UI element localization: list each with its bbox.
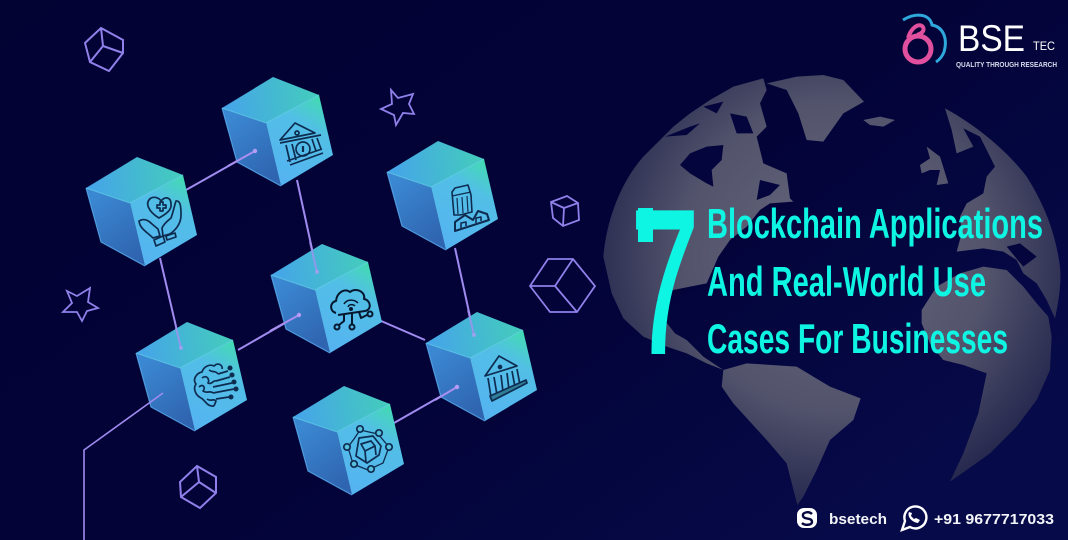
cube: healthcare [86, 157, 197, 266]
land: British Isles [920, 147, 948, 185]
icon: box in network ring [344, 426, 392, 472]
globe [603, 75, 1060, 505]
cube: real estate [387, 141, 498, 250]
skype handle: bsetech [829, 511, 887, 528]
logo tagline: QUALITY THROUGH RESEARCH [956, 60, 1057, 69]
title [631, 169, 1043, 396]
icon: skype [797, 508, 817, 528]
cube: government bank [426, 312, 537, 421]
land: Iceland [863, 117, 895, 127]
land: South America [722, 363, 861, 505]
land: Africa [922, 267, 1052, 482]
water: Hudson Bay and arctic channels [665, 102, 1037, 267]
phone number: +91 9677717033 [934, 511, 1054, 528]
icon: large outline cube right [530, 259, 595, 312]
icon: small outline cube right [551, 196, 579, 226]
logo: BSE Tec: TEC [1033, 41, 1055, 53]
logo wordmark: BSE [958, 18, 1025, 59]
title numeral 7: 7 [631, 169, 699, 396]
water: Gulf and Caribbean [670, 290, 730, 350]
land: North and Central America [603, 78, 793, 370]
cube: cloud network [271, 244, 382, 353]
icon: outline cube top left [85, 28, 123, 71]
connector line: lower left trace [84, 393, 163, 540]
icon: star top [381, 90, 414, 125]
connector lines behind cubes [160, 151, 474, 423]
logo: BSE Tec [903, 15, 1057, 69]
connector lines over cubes [176, 149, 476, 400]
logo mark [903, 15, 945, 62]
icon: star left [63, 288, 98, 321]
icon: circuit brain [195, 364, 238, 406]
cube: supply chain box [293, 386, 404, 495]
cube: AI brain [136, 322, 247, 431]
icon: outline cube bottom [180, 466, 216, 508]
icon: bank with coin [280, 123, 323, 165]
land: Europe and Asia [945, 108, 1060, 318]
title text [707, 200, 1043, 362]
cube: banking with coin [222, 77, 333, 186]
icon: heart in hands [139, 197, 181, 246]
icon: whatsapp [902, 506, 926, 530]
icon: classical bank [485, 356, 527, 401]
land: Greenland [767, 75, 864, 142]
icon: cloud with wifi and circuits [331, 290, 372, 330]
icon: tower and houses [452, 185, 489, 231]
contact bar [797, 506, 1054, 530]
